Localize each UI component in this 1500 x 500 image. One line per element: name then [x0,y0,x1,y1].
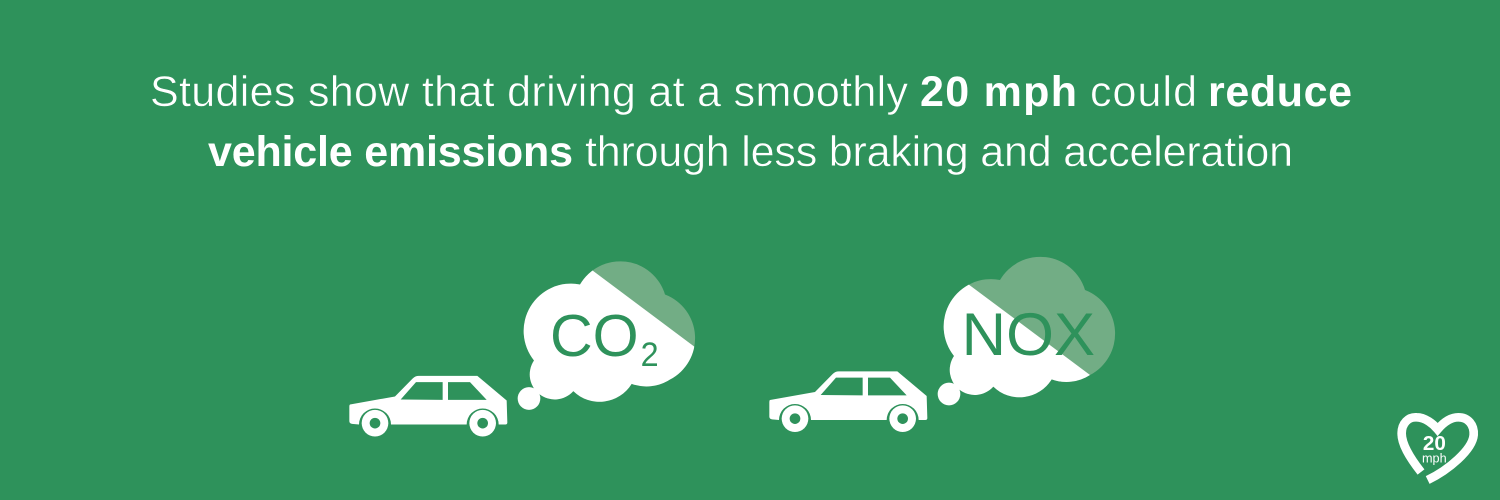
title: could [1090,68,1197,116]
title: Studies show that driving at a smoothly [150,68,908,116]
CO2 car and cloud [349,261,695,436]
icon: CO2 cloud [518,261,695,410]
label: subscript 2: 2 [641,336,659,374]
logo: 20 mph heart: mph [1422,452,1447,466]
title: through less braking and acceleration [585,128,1293,176]
icon: NOX cloud [938,257,1115,405]
title: 20 mph [920,68,1077,116]
logo: 20 mph heart [1402,417,1474,480]
label: CO2: CO [550,302,639,369]
NOX car and cloud [769,257,1115,432]
title [150,68,1352,176]
icon: car CO2 [349,376,507,436]
label: NOX: NOX [962,301,1095,368]
title: reduce [1208,68,1352,116]
title: vehicle emissions [208,128,573,176]
icon: car NOX [769,371,927,432]
logo: 20 mph heart: 20 [1423,432,1446,455]
